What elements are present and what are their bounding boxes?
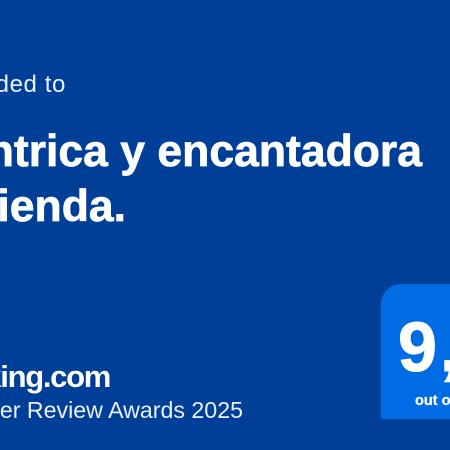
title: property description <box>0 127 423 231</box>
score badge <box>381 284 450 419</box>
